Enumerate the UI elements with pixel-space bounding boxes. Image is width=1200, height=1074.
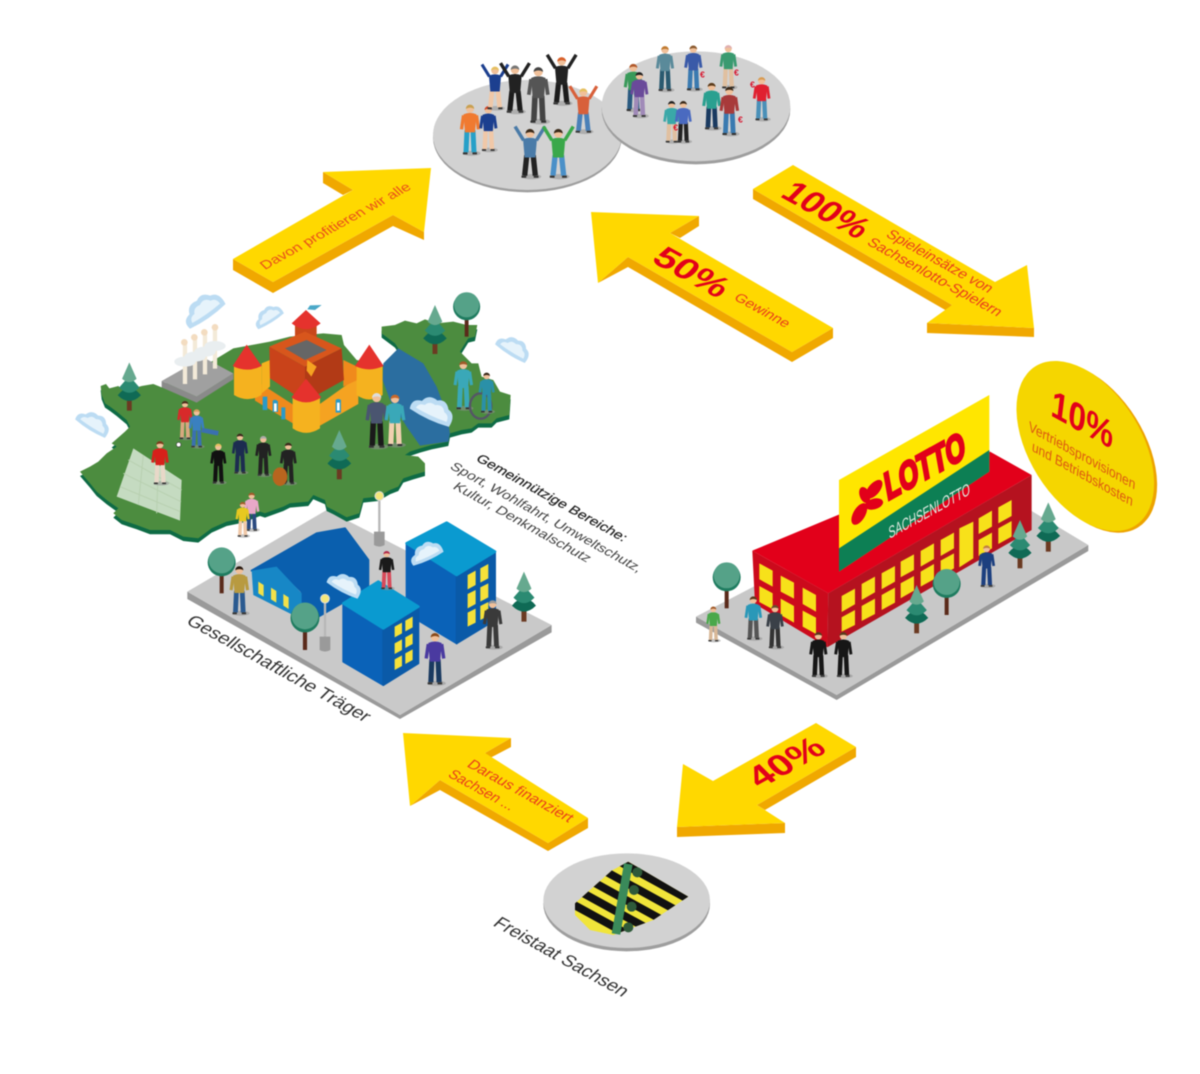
arrow caption: Sachsen ...: [444, 767, 519, 814]
gold disk: 10 percent: [988, 337, 1186, 557]
50 percent figure: 50%: [645, 240, 739, 304]
euro symbols: €: [673, 122, 678, 132]
shop trees: [713, 502, 1060, 633]
town buildings: [208, 492, 536, 686]
people disk: left group cheering: [433, 55, 622, 192]
family: [237, 493, 260, 538]
string quartet: [212, 434, 297, 486]
ballet platform: [162, 324, 233, 403]
trees: [208, 547, 536, 650]
soccer goal: [117, 441, 182, 521]
lamp posts: [320, 492, 385, 652]
arrow: 100% Spieleinsätze: [753, 165, 1034, 337]
shop people: [707, 545, 995, 678]
arrow text: Davon profitieren wir alle: [257, 181, 415, 273]
clouds on buildings: [326, 537, 444, 600]
platform: Gesellschaftliche Träger: [187, 510, 552, 719]
clover logo: [848, 477, 886, 527]
10 percent figure: 10%: [1049, 381, 1116, 457]
caption: Gemeinnützige Bereiche: Sport, Wohlfahrt, Umweltschutz,: [447, 459, 647, 575]
building: [752, 452, 1032, 647]
players: [625, 45, 771, 144]
arrow caption: Spieleinsätze von: [882, 227, 997, 296]
Lotto shop: [696, 337, 1186, 700]
cheering people: [461, 55, 597, 179]
caption: Freistaat Sachsen: Freistaat Sachsen: [489, 914, 633, 1001]
disk caption: und Betriebskosten: [1031, 438, 1134, 509]
castle: [233, 305, 384, 433]
elderly couple: [367, 393, 406, 449]
castle towers: [233, 305, 384, 433]
arrow: 50% Gewinne: [591, 212, 833, 362]
arrow caption: Daraus finanziert: [463, 757, 578, 826]
caption: Gesellschaftliche Träger: Gesellschaftliche Träger: [182, 612, 376, 726]
football players: [176, 401, 218, 449]
clouds: [74, 287, 534, 439]
SACHSENLOTTO wordmark: SACHSENLOTTO: [888, 479, 971, 543]
euro symbols: [673, 68, 755, 132]
euro symbols: €: [700, 69, 705, 79]
euro symbols: €: [734, 68, 739, 78]
shop platform: [696, 474, 1088, 700]
map of Saxony: [74, 287, 534, 543]
caption: Gemeinnützige Bereiche: Kultur, Denkmalschutz: [450, 479, 595, 565]
long building: [252, 528, 368, 619]
disk caption: Vertriebsprovisionen: [1028, 418, 1136, 493]
arrow caption: Sachsenlotto-Spielern: [863, 235, 1006, 319]
townspeople: [231, 551, 503, 686]
trees on map: [118, 292, 480, 479]
Lotto sign: [839, 395, 989, 572]
shop windows: [759, 500, 1012, 634]
caption: Gemeinnützige Bereiche: Gemeinnützige Bereiche:: [473, 451, 631, 544]
100 percent figure: 100%: [773, 175, 878, 245]
small block: [343, 582, 418, 685]
arrow caption: Gewinne: [730, 291, 794, 331]
40 percent figure: 40%: [739, 730, 834, 795]
arrow: Davon profitieren wir alle: [233, 168, 431, 293]
arrow: Daraus finanziert Sachsen: [403, 733, 588, 851]
tall block: [407, 523, 495, 643]
euro symbols: €: [750, 79, 755, 89]
people disk: right group with winnings: [602, 45, 790, 164]
arrow: 40%: [677, 723, 856, 837]
LOTTO wordmark: LOTTO: [881, 423, 968, 509]
euro symbols: €: [738, 114, 743, 124]
wheelchair carer: [455, 361, 495, 419]
lake: [383, 348, 450, 446]
disk: Freistaat Sachsen coat of arms: [542, 853, 710, 952]
coat of arms: [574, 861, 689, 936]
